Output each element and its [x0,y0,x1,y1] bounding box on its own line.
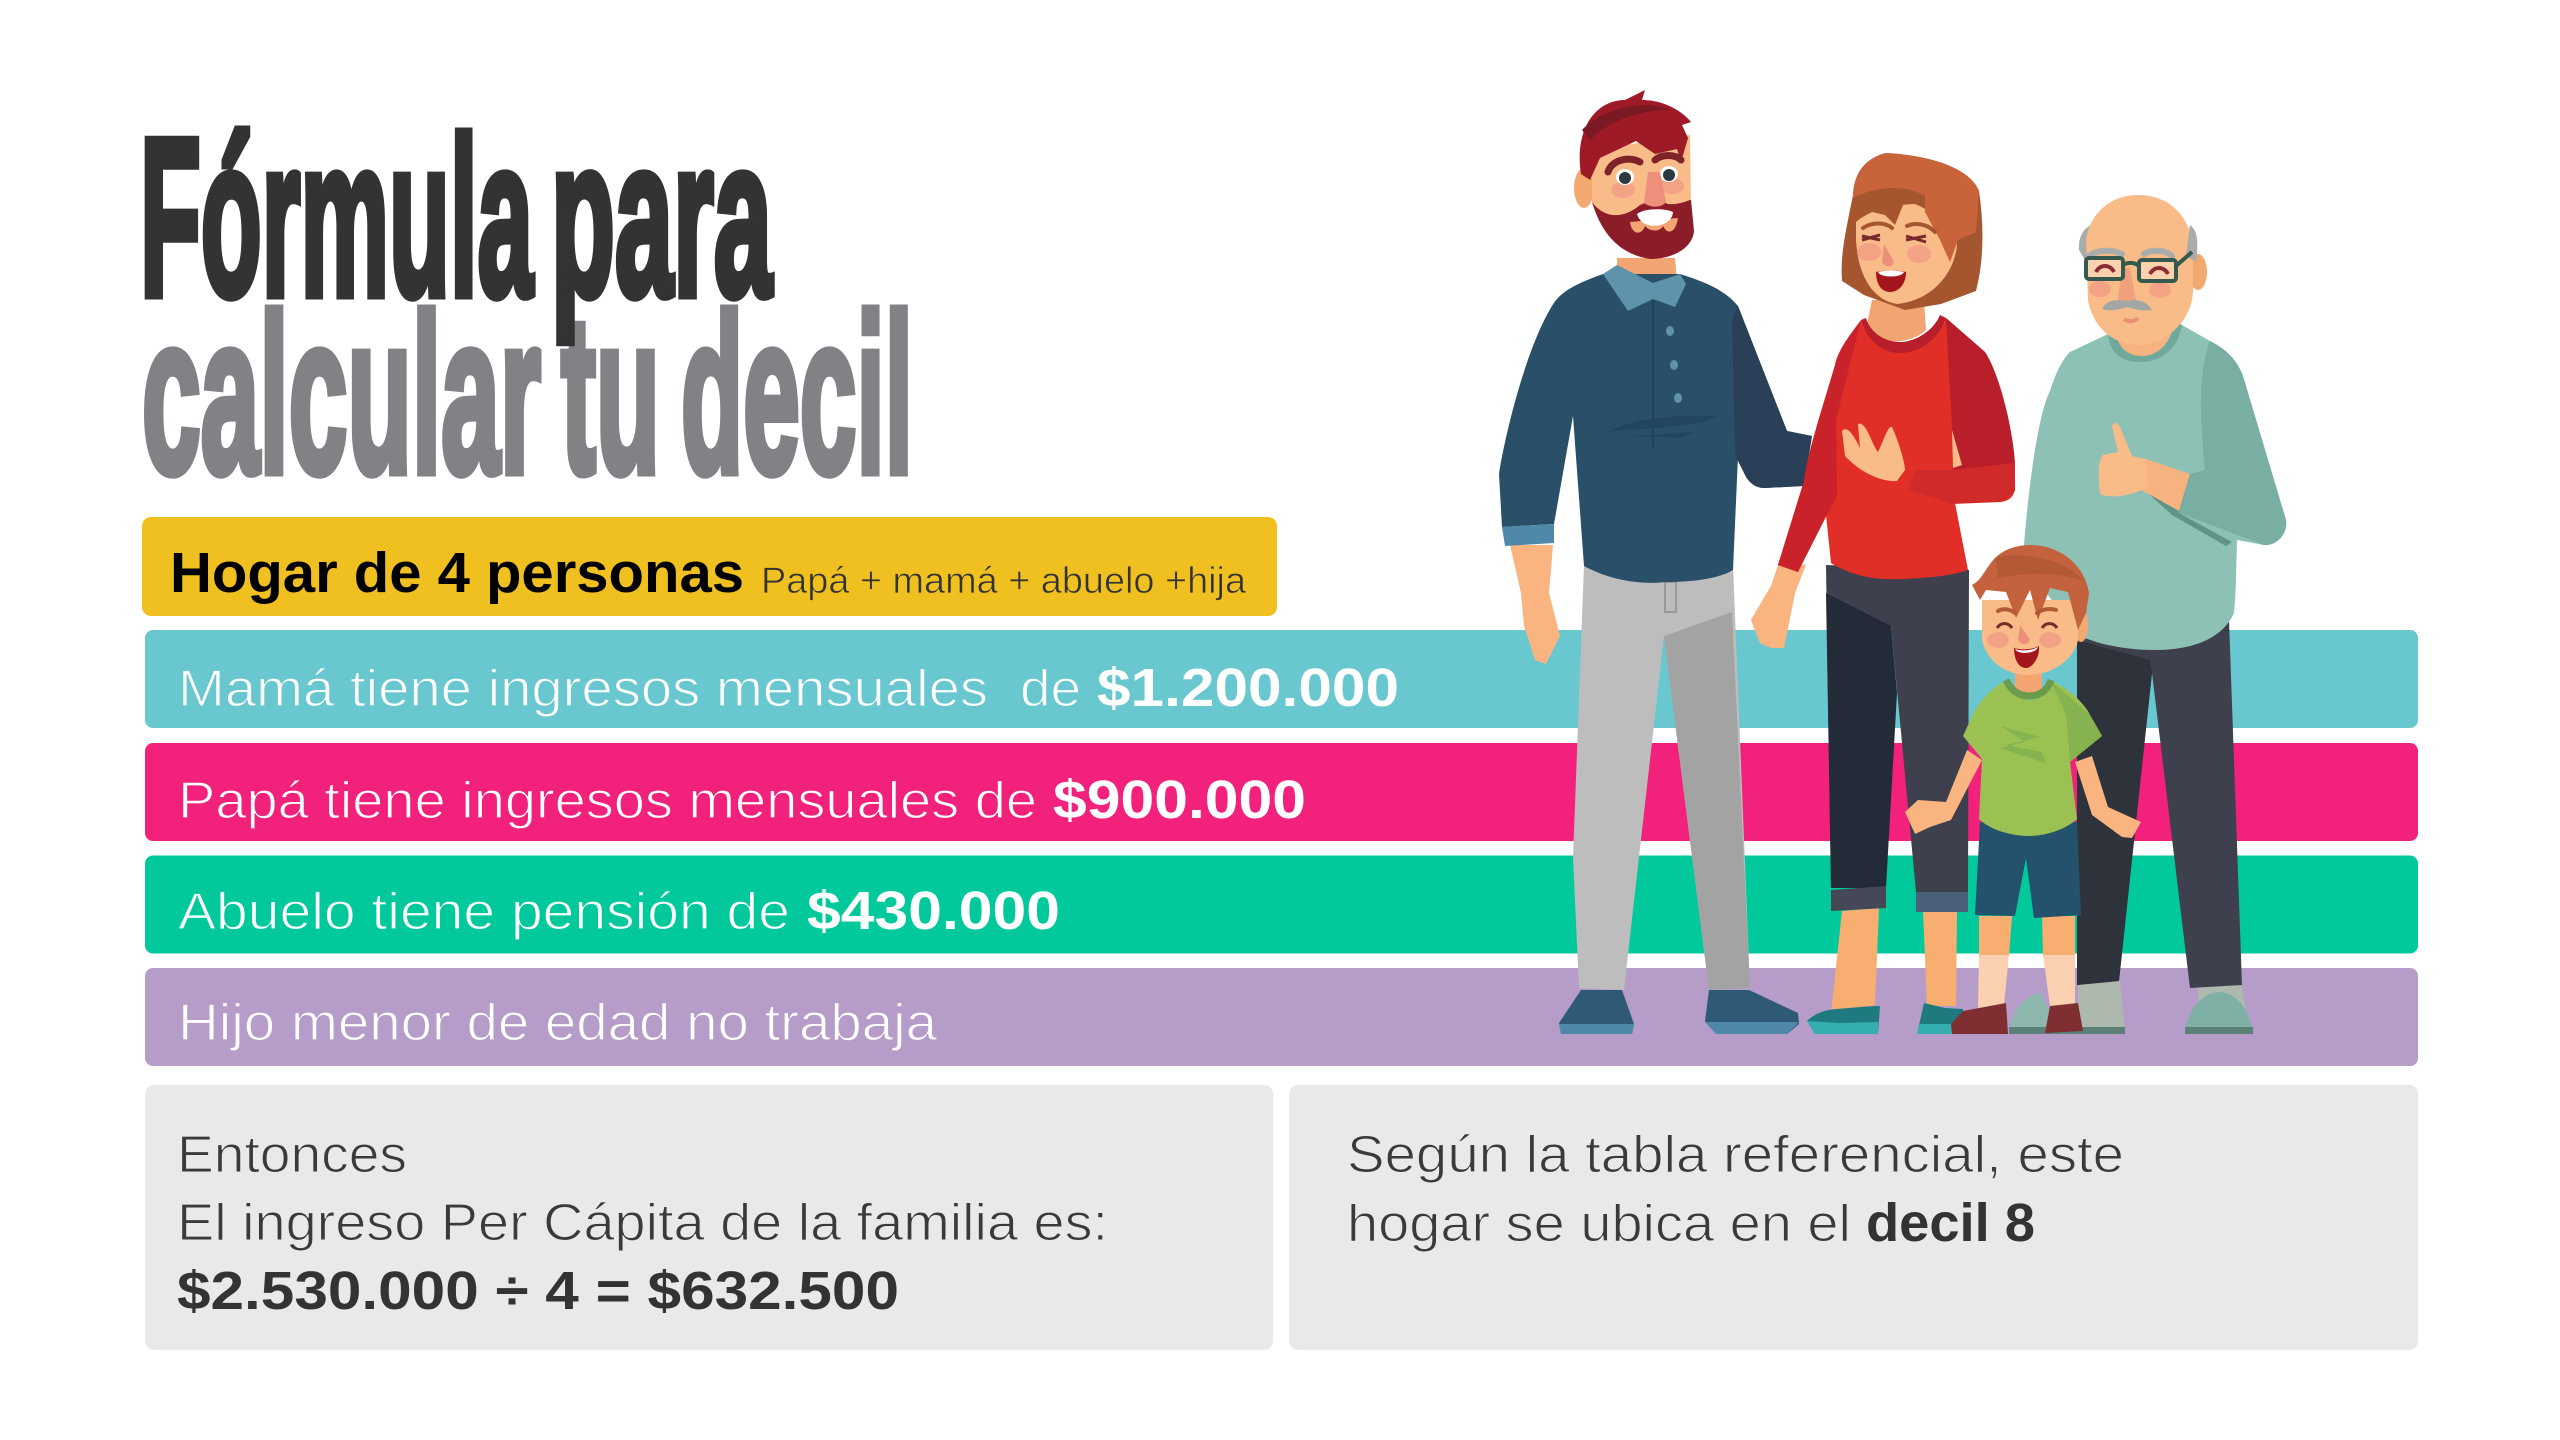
panel: resultado decil [1289,1085,2418,1350]
row: hijo [145,968,2418,1066]
panel: ingreso per cápita: El ingreso Per Cápita de la familia es: [177,1194,1108,1252]
figure: hijo [1905,545,2141,1034]
illustration: family [1499,90,2286,1034]
panel: resultado decil: hogar se ubica en el [1347,1195,1851,1253]
row: abuelo [145,856,2418,954]
panel: hogar de 4 personas: Papá + mamá + abuelo +hija [761,560,1246,601]
figure: mamá [1751,153,2015,1034]
title [140,91,913,520]
text: decil [681,268,913,520]
row: mamá [145,630,2418,728]
row: abuelo: Abuelo tiene pensión de [178,883,790,941]
figure: papá [1499,90,1812,1034]
row: mamá: Mamá tiene ingresos mensuales [178,660,988,718]
title line 1: Fórmula para: Fórmula [140,91,534,343]
row: papá [145,743,2418,841]
panel: hogar de 4 personas [142,517,1277,616]
panel: ingreso per cápita: Entonces [177,1126,407,1184]
panel: resultado decil: Según la tabla referencial, este [1347,1126,2124,1184]
row: abuelo: $430.000 [807,881,1060,941]
title line 2: calcular tu decil: calcular [142,268,541,520]
row: papá: $900.000 [1053,770,1306,830]
figure: abuelo [2009,195,2286,1034]
panel: ingreso per cápita [145,1085,1273,1350]
title line 2: calcular tu decil: tu [561,268,660,520]
row: papá: Papá tiene ingresos mensuales de [178,772,1037,830]
panel: ingreso per cápita: $2.530.000 ÷ 4 = $632.500 [177,1261,899,1321]
row: mamá: $1.200.000 [1097,658,1399,718]
row: mamá: de [1020,660,1081,718]
panel: resultado decil: decil 8 [1866,1193,2035,1253]
panel: hogar de 4 personas: Hogar de 4 personas [170,541,744,605]
title: para [551,91,773,343]
row: hijo: Hijo menor de edad no trabaja [178,994,937,1052]
